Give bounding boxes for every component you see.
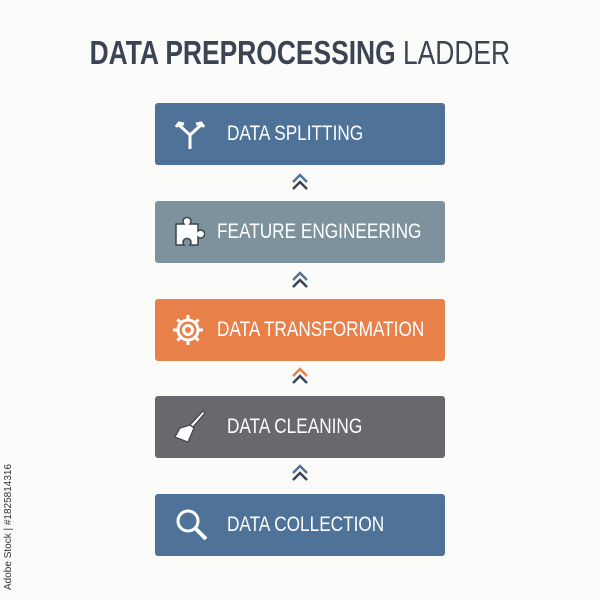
step: data collection: DATA COLLECTION [227,513,384,536]
step: data splitting [155,103,445,165]
arrow: up chevron [292,271,308,288]
icon: split arrows [174,121,206,149]
step: data cleaning: DATA CLEANING [227,415,362,438]
step: data collection [155,494,445,556]
arrow: up chevron [292,173,308,190]
icon: puzzle [175,216,205,246]
icon: magnifier [176,510,208,540]
step: data splitting: DATA SPLITTING [227,122,363,145]
icon: gear [173,315,203,345]
step: feature engineering: FEATURE ENGINEERING [217,220,421,243]
arrow: up chevron [292,464,308,481]
step: feature engineering [155,201,445,263]
side credit: Adobe Stock | #1825814316 [3,464,14,590]
step: data transformation: DATA TRANSFORMATION [217,318,424,341]
icon: broom [174,410,206,443]
step: data transformation [155,299,445,361]
step: data cleaning [155,396,445,458]
title: DATA PREPROCESSING LADDER [90,34,510,71]
arrow: up chevron [292,367,308,384]
